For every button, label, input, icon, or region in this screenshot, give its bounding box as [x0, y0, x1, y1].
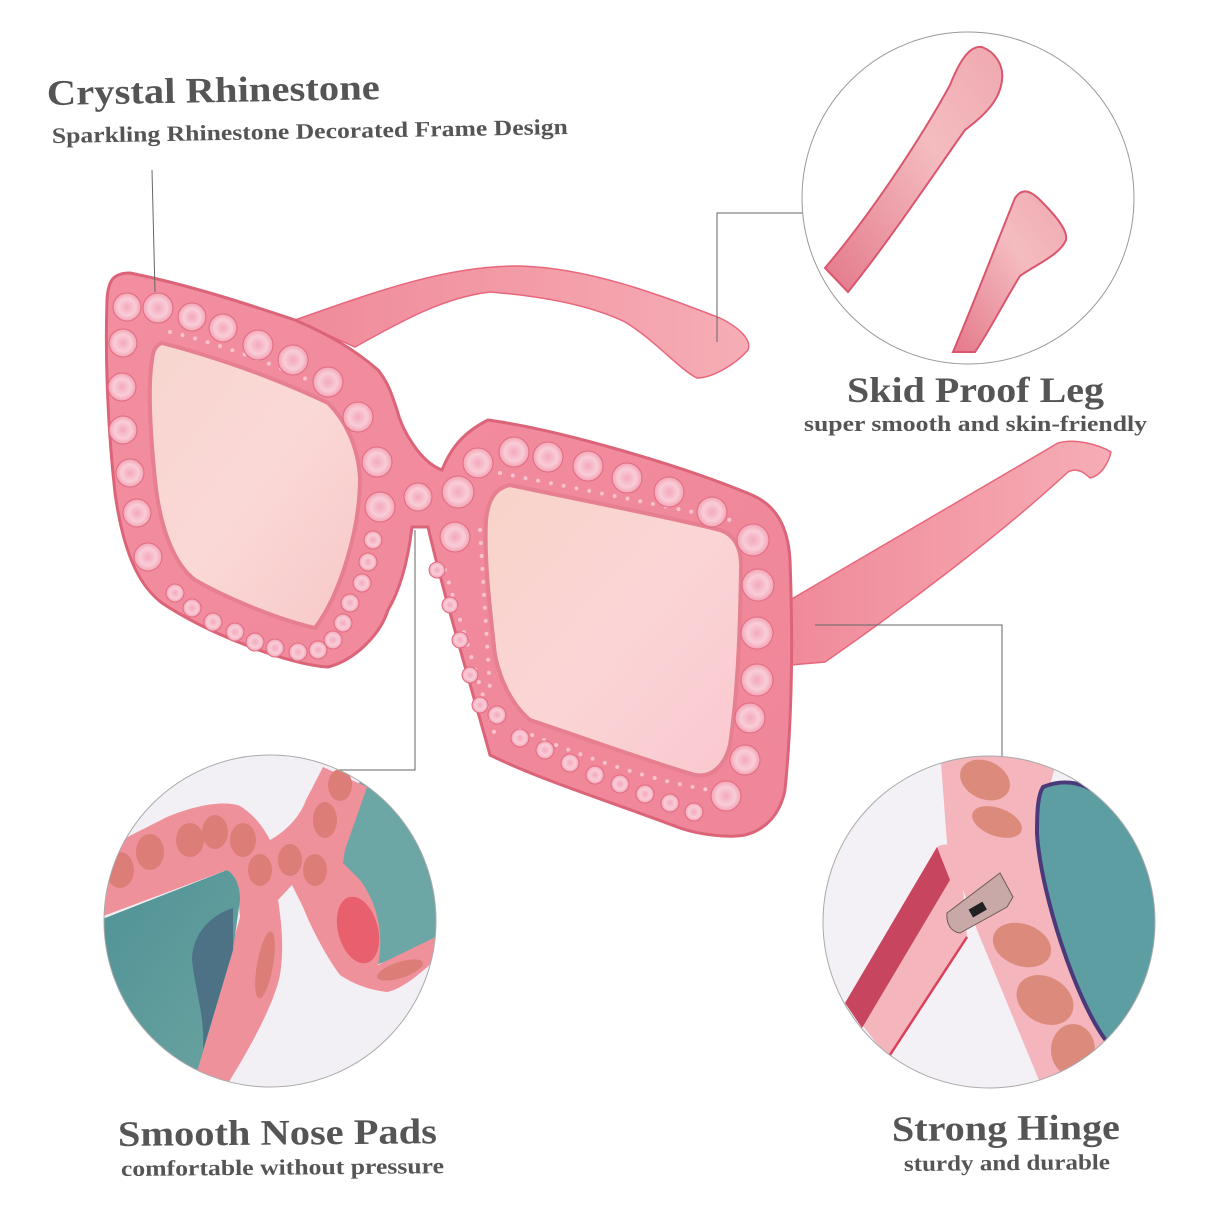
- teal lens: [1037, 782, 1165, 1042]
- right lens: [486, 485, 741, 775]
- right temple arm: [790, 441, 1111, 665]
- heading: Skid Proof Leg: Skid Proof Leg: [847, 370, 1104, 410]
- leader lines: [152, 170, 1002, 770]
- temple dark stripe: [845, 847, 950, 1028]
- inset circle: hinge: [823, 750, 1165, 1090]
- text: comfortable without pressure: comfortable without pressure: [121, 1153, 444, 1181]
- hinge hole: [969, 902, 987, 917]
- frame: [98, 767, 440, 1085]
- frame: [106, 273, 792, 836]
- stones on band: [953, 752, 1095, 1076]
- temple tip small: [953, 191, 1066, 352]
- lens shade: [192, 908, 233, 1050]
- small dots along frame: [170, 332, 730, 790]
- inset circle outline: nose pads: [104, 755, 436, 1087]
- left lens: [95, 870, 240, 1072]
- nose pad: [336, 896, 380, 964]
- text: Sparkling Rhinestone Decorated Frame Design: Sparkling Rhinestone Decorated Frame Design: [52, 114, 568, 148]
- main product: pink rhinestone sunglasses: [106, 266, 1111, 836]
- left temple arm: [295, 266, 749, 378]
- temple edge line: [888, 937, 967, 1058]
- right lens: [340, 780, 440, 965]
- text: super smooth and skin-friendly: super smooth and skin-friendly: [804, 411, 1147, 436]
- frame band: [941, 756, 1104, 1080]
- heading: Crystal Rhinestone: Crystal Rhinestone: [46, 67, 380, 113]
- temple arm: [845, 844, 967, 1058]
- inset circle: temple tips: [824, 46, 1068, 353]
- inset circle outline: temple tips: [802, 32, 1134, 364]
- left lens: [150, 343, 360, 628]
- hinge metal: [947, 873, 1013, 933]
- heading: Smooth Nose Pads: Smooth Nose Pads: [118, 1111, 437, 1154]
- text: sturdy and durable: sturdy and durable: [904, 1149, 1110, 1176]
- heading: Strong Hinge: Strong Hinge: [892, 1107, 1120, 1149]
- inset circle outline: hinge: [823, 756, 1155, 1088]
- rhinestones on frame: [106, 769, 425, 1000]
- temple tip large: [825, 47, 1002, 292]
- rhinestones: [108, 293, 774, 821]
- inset circle: nose pads: [95, 755, 440, 1087]
